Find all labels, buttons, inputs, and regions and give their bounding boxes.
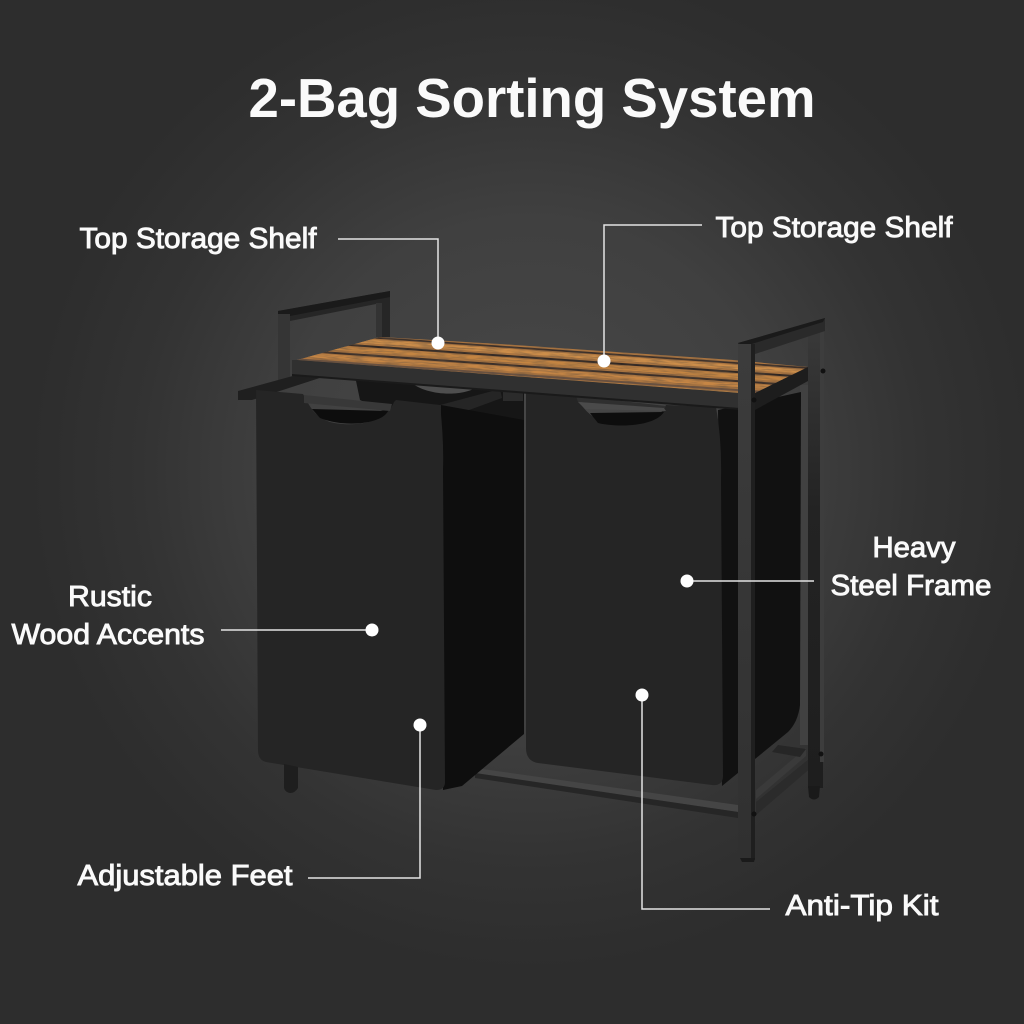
back shadow under shelf	[355, 376, 524, 440]
callout: rustic wood accents: Rustic	[68, 581, 152, 613]
callout: anti-tip kit	[636, 688, 939, 922]
callout: rustic wood accents	[12, 581, 378, 651]
callout: top storage shelf left	[80, 223, 444, 350]
callout: top storage shelf right	[598, 212, 953, 368]
left upper frame handle	[278, 291, 390, 380]
callout: heavy steel frame	[680, 532, 992, 602]
callout: rustic wood accents: Wood Accents	[12, 619, 205, 651]
left foot	[284, 764, 298, 793]
callout: adjustable feet	[78, 718, 426, 892]
callout: top storage shelf left: Top Storage Shelf	[80, 223, 317, 255]
left bag handle bar	[304, 395, 392, 411]
callout: heavy steel frame: Heavy	[872, 532, 956, 564]
title: 2-Bag Sorting System	[248, 67, 816, 129]
shelf right side lip	[755, 367, 808, 410]
right front post	[738, 344, 826, 862]
bag pull-out rails	[238, 374, 523, 417]
rear leg strip	[800, 385, 808, 745]
left bag side panel	[441, 405, 524, 790]
product illustration: laundry sorter	[238, 291, 831, 862]
right rear post	[808, 322, 824, 800]
right top handle rail	[738, 318, 825, 354]
callout: heavy steel frame: Steel Frame	[830, 570, 992, 602]
shelf front lip	[292, 360, 740, 409]
left bag front	[256, 390, 445, 790]
bottom frame rail	[475, 745, 820, 818]
right bag side panel	[718, 392, 801, 786]
right bag handle	[576, 396, 666, 409]
shelf wood top	[297, 337, 808, 393]
callout: anti-tip kit: Anti-Tip Kit	[786, 890, 939, 922]
callout: adjustable feet: Adjustable Feet	[78, 860, 293, 892]
right bag front	[526, 392, 723, 785]
callout: top storage shelf right: Top Storage Shelf	[716, 212, 953, 244]
